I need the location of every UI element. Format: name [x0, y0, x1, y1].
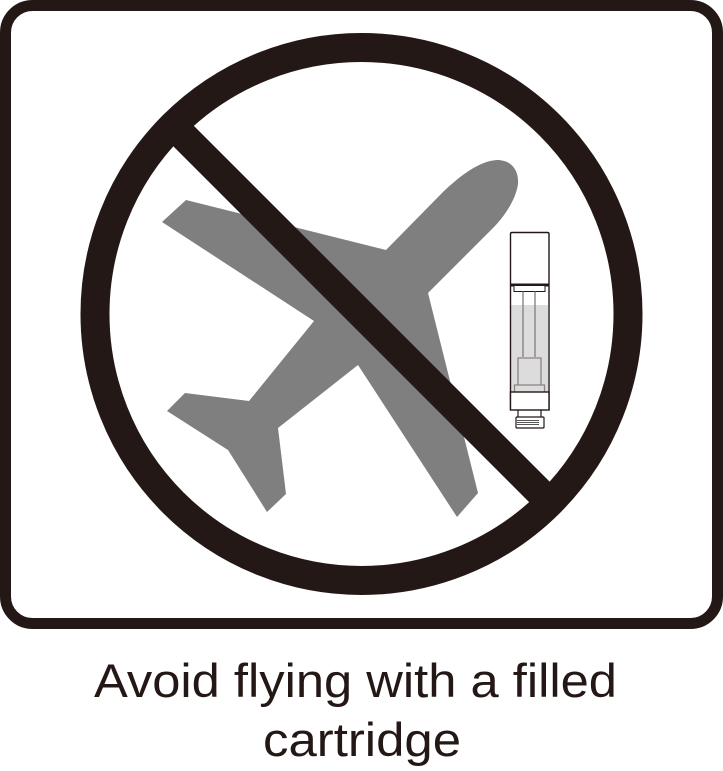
cartridge oil fill — [511, 305, 548, 392]
caption — [94, 654, 617, 766]
cartridge threaded tip — [516, 417, 544, 428]
icon: grey airplane — [162, 160, 518, 517]
cartridge top collar — [514, 286, 545, 292]
caption: cartridge — [263, 713, 461, 766]
icon: prohibition circle and slash — [95, 48, 628, 580]
cartridge base — [510, 392, 549, 410]
panel: rounded sign frame — [6, 6, 718, 624]
cartridge centre post — [523, 292, 535, 357]
cartridge thread lines — [517, 420, 539, 424]
cartridge coil housing — [514, 358, 544, 392]
cartridge body outline — [510, 232, 549, 410]
caption: Avoid flying with a filled — [94, 654, 617, 707]
cartridge mouthpiece base bar — [510, 284, 550, 286]
cartridge neck — [518, 410, 541, 417]
icon: vape cartridge — [510, 232, 550, 428]
